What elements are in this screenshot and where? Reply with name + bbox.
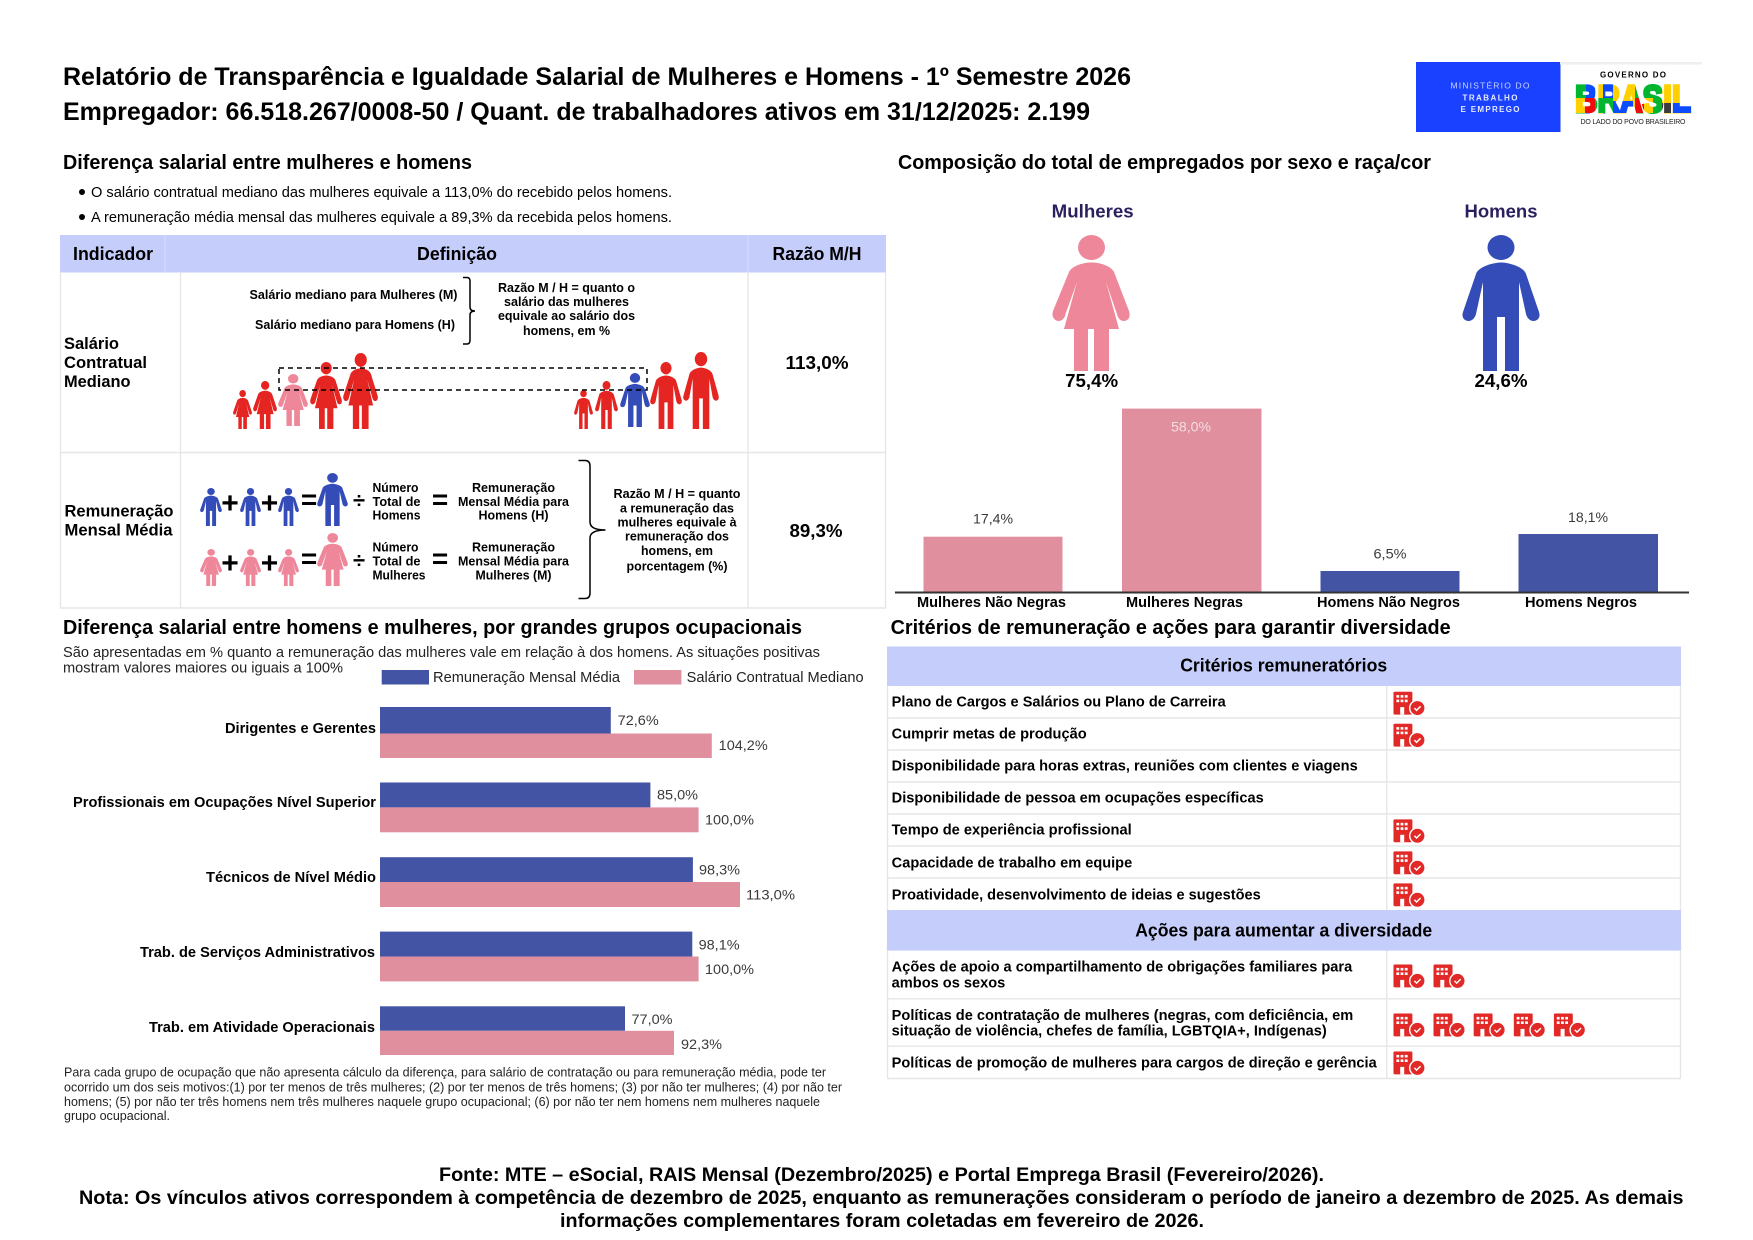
criteria rows [892,692,1426,908]
header: critérios remuneratórios [887,646,1681,686]
formula: homens: + [261,487,278,520]
action rows: Políticas de contratação de mulheres (negras, com deficiência, em [892,1008,1353,1024]
formula: mulheres: Mulheres (M) [476,567,552,582]
group: técnicos: 113,0% [746,886,795,902]
row: remuneração mensal média: porcentagem (%) [626,559,728,574]
group: dirigentes e gerentes: 72,6% [618,712,659,728]
bullet list [79,184,672,226]
formula: mulheres: Mensal Média para [458,553,570,568]
group: atividade operacionais: Trab. em Atividade Operacionais [149,1020,375,1036]
column chart: raça e sexo [895,409,1689,611]
bar: mulheres negras: Mulheres Negras [1126,595,1243,611]
formula: homens: = [301,484,317,515]
group: dirigentes e gerentes [225,707,768,758]
bar: homens não negros: 6,5% [1374,546,1406,562]
group: serviços administrativos: 98,1% [699,936,740,952]
table header [60,235,886,272]
group: técnicos: 98,3% [699,862,740,878]
formula: mulheres: Mulheres [372,567,426,582]
formula: homens [200,473,570,526]
panel: critérios e ações [887,646,1681,1078]
formula: mulheres [200,533,570,586]
bar: homens negros: 18,1% [1568,509,1608,525]
logo: ministério e governo: BRASIL [1575,79,1691,121]
action rows: Ações de apoio a compartilhamento de obrigações familiares para [892,960,1353,976]
chart description [63,645,820,677]
heading: diferença salarial: Diferença salarial entre mulheres e homens [63,152,472,174]
title: Empregador: 66.518.267/0008-50 / Quant. de trabalhadores ativos em 31/12/2025: 2.199 [63,98,1090,126]
logo: ministério e governo [1416,62,1702,132]
action rows [892,960,1586,1076]
group: técnicos [206,857,795,907]
row: salário contratual mediano: Salário mediano para Homens (H) [255,317,455,332]
group: serviços administrativos: Trab. de Serviços Administrativos [140,945,375,961]
table header: Definição [417,244,497,264]
bar: homens não negros: Homens Não Negros [1317,595,1460,611]
criteria rows: Disponibilidade de pessoa em ocupações específicas [892,791,1264,807]
title: Relatório de Transparência e Igualdade Salarial de Mulheres e Homens - 1º Semestre 2026 [63,63,1131,91]
logo: ministério e governo: MINISTÉRIO DO [1450,81,1530,91]
group: atividade operacionais: 77,0% [632,1011,672,1027]
formula: homens: = [432,484,448,515]
group: profissionais: 100,0% [705,812,754,828]
header: ações para aumentar a diversidade [887,910,1681,951]
group: profissionais: Profissionais em Ocupações Nível Superior [73,795,376,811]
pictogram: mulheres: 75,4% [1065,371,1118,391]
action rows: ambos os sexos [892,976,1005,992]
formula: mulheres: = [301,543,317,574]
row: salário contratual mediano: homens, em % [523,323,610,338]
bar: homens negros: Homens Negros [1525,595,1637,611]
group: profissionais: 85,0% [657,786,698,802]
pictogram: homens: Homens [1464,202,1538,222]
row: remuneração mensal média: mulheres equivale à [618,515,737,530]
criteria rows: Proatividade, desenvolvimento de ideias e sugestões [892,888,1261,904]
group: serviços administrativos: 100,0% [705,961,754,977]
bar: mulheres não negras: 17,4% [973,510,1013,526]
pictogram: mulheres [1052,202,1134,391]
action rows: situação de violência, chefes de família, LGBTQIA+, Indígenas) [892,1024,1327,1040]
logo: ministério e governo: GOVERNO DO [1600,70,1666,79]
formula: homens: Total de [372,494,420,509]
icon: family of women [233,353,378,429]
heading: grupos ocupacionais: Diferença salarial entre homens e mulheres, por grandes grupos ocupacionais [63,617,802,639]
group: dirigentes e gerentes: 104,2% [719,737,768,753]
legend: Remuneração Mensal Média [433,670,621,686]
row: remuneração mensal média: Remuneração [64,503,174,521]
formula: homens: Remuneração [472,480,555,495]
group: profissionais [73,782,754,832]
criteria rows: Plano de Cargos e Salários ou Plano de Carreira [892,695,1227,711]
row: remuneração mensal média: 89,3% [790,521,842,541]
row: remuneração mensal média: Mensal Média [64,522,173,540]
heading: composição: Composição do total de empregados por sexo e raça/cor [898,152,1431,174]
bar: mulheres não negras: Mulheres Não Negras [917,595,1066,611]
footnote: homens; (5) por não ter três homens nem três mulheres naquele grupo ocupacional; (6) por não ter nem homens nem mulheres naquele [64,1094,820,1109]
chart description: mostram valores maiores ou iguais a 100% [63,661,343,677]
footnote: ocorrido um dos seis motivos:(1) por ter menos de três mulheres; (2) por ter menos de três homens; (3) por não ter mulheres; (4) por não ter [64,1080,843,1095]
criteria rows: Disponibilidade para horas extras, reuniões com clientes e viagens [892,759,1358,775]
title [63,63,1131,126]
footnote: grupo ocupacional. [64,1108,170,1123]
formula: mulheres: + [261,547,278,580]
criteria rows: Cumprir metas de produção [892,727,1087,743]
header: ações para aumentar a diversidade: Ações para aumentar a diversidade [1135,920,1432,940]
table header: Razão M/H [772,244,862,264]
group: atividade operacionais: 92,3% [681,1036,722,1052]
criteria rows: Capacidade de trabalho em equipe [892,856,1132,872]
bar chart: grupos ocupacionais [73,707,795,1055]
formula: mulheres: ÷ [353,548,365,573]
row: salário contratual mediano: Salário [64,335,119,353]
row: salário contratual mediano: Salário mediano para Mulheres (M) [250,287,458,302]
logo: ministério e governo: E EMPREGO [1460,105,1520,114]
formula: homens: Número [372,480,419,495]
row: remuneração mensal média: homens, em [641,543,713,558]
formula: homens: ÷ [353,488,365,513]
header: critérios remuneratórios: Critérios remuneratórios [1180,655,1387,675]
pictogram: homens [1462,202,1540,391]
formula: homens: Homens [372,508,420,523]
panel: tabela indicador definição razão [60,235,886,608]
row: remuneração mensal média [64,460,842,598]
row: remuneração mensal média: a remuneração das [620,501,734,516]
legend [382,670,864,686]
row: salário contratual mediano: equivale ao salário dos [498,308,635,323]
group: serviços administrativos [140,932,754,981]
bullet list: A remuneração média mensal das mulheres equivale a 89,3% da recebida pelos homens. [91,209,672,226]
row: salário contratual mediano: Razão M / H = quanto o [498,280,635,295]
row: remuneração mensal média: remuneração dos [625,529,729,544]
group: técnicos: Técnicos de Nível Médio [206,870,376,886]
criteria rows: Tempo de experiência profissional [892,823,1132,839]
bar: mulheres negras: 58,0% [1171,418,1211,434]
formula: mulheres: + [221,547,239,580]
footnote: Para cada grupo de ocupação que não apresenta cálculo da diferença, para salário de contratação ou para remuneração média, pode ter [64,1065,827,1080]
group: atividade operacionais [149,1006,722,1055]
logo: ministério e governo: DO LADO DO POVO BRASILEIRO [1580,119,1686,126]
formula: mulheres: Número [372,540,419,555]
action rows: Políticas de promoção de mulheres para cargos de direção e gerência [892,1056,1378,1072]
row: salário contratual mediano [64,278,848,429]
formula: homens: + [221,487,239,520]
group: dirigentes e gerentes: Dirigentes e Gerentes [225,721,376,737]
chart description: São apresentadas em % quanto a remuneração das mulheres vale em relação à dos homens. As situações positivas [63,645,820,661]
bar: homens negros [1518,509,1658,611]
footnote [64,1065,843,1123]
footer: fonte e nota [79,1164,1684,1232]
pictogram: mulheres: Mulheres [1052,202,1134,222]
legend: Salário Contratual Mediano [687,670,864,686]
icon: family of men [574,352,719,429]
row: remuneração mensal média: Razão M / H = quanto [614,486,741,501]
bullet list: O salário contratual mediano das mulheres equivale a 113,0% do recebido pelos homens. [91,184,672,201]
formula: homens: Mensal Média para [458,494,570,509]
formula: homens: Homens (H) [478,508,548,523]
footer: fonte e nota: Nota: Os vínculos ativos correspondem à competência de dezembro de 2025, enquanto as remunerações consideram o período de janeiro a dezembro de 2025. As demais [79,1187,1684,1209]
row: salário contratual mediano: Contratual [64,354,147,372]
formula: mulheres: = [432,543,448,574]
heading: critérios: Critérios de remuneração e ações para garantir diversidade [891,617,1451,639]
row: salário contratual mediano: salário das mulheres [504,294,629,309]
formula: mulheres: Total de [372,553,420,568]
footer: fonte e nota: Fonte: MTE – eSocial, RAIS Mensal (Dezembro/2025) e Portal Emprega Brasil (Fevereiro/2026). [439,1164,1324,1186]
pictogram: homens: 24,6% [1474,371,1528,391]
bar: homens não negros [1317,546,1460,611]
row: salário contratual mediano: Mediano [64,373,130,391]
bar: mulheres negras [1122,409,1262,611]
row: salário contratual mediano: 113,0% [786,353,848,373]
table header: Indicador [73,244,153,264]
footer: fonte e nota: informações complementares foram coletadas em fevereiro de 2026. [560,1210,1204,1232]
bar: mulheres não negras [917,510,1066,611]
logo: ministério e governo: TRABALHO [1462,94,1518,103]
formula: mulheres: Remuneração [472,540,555,555]
